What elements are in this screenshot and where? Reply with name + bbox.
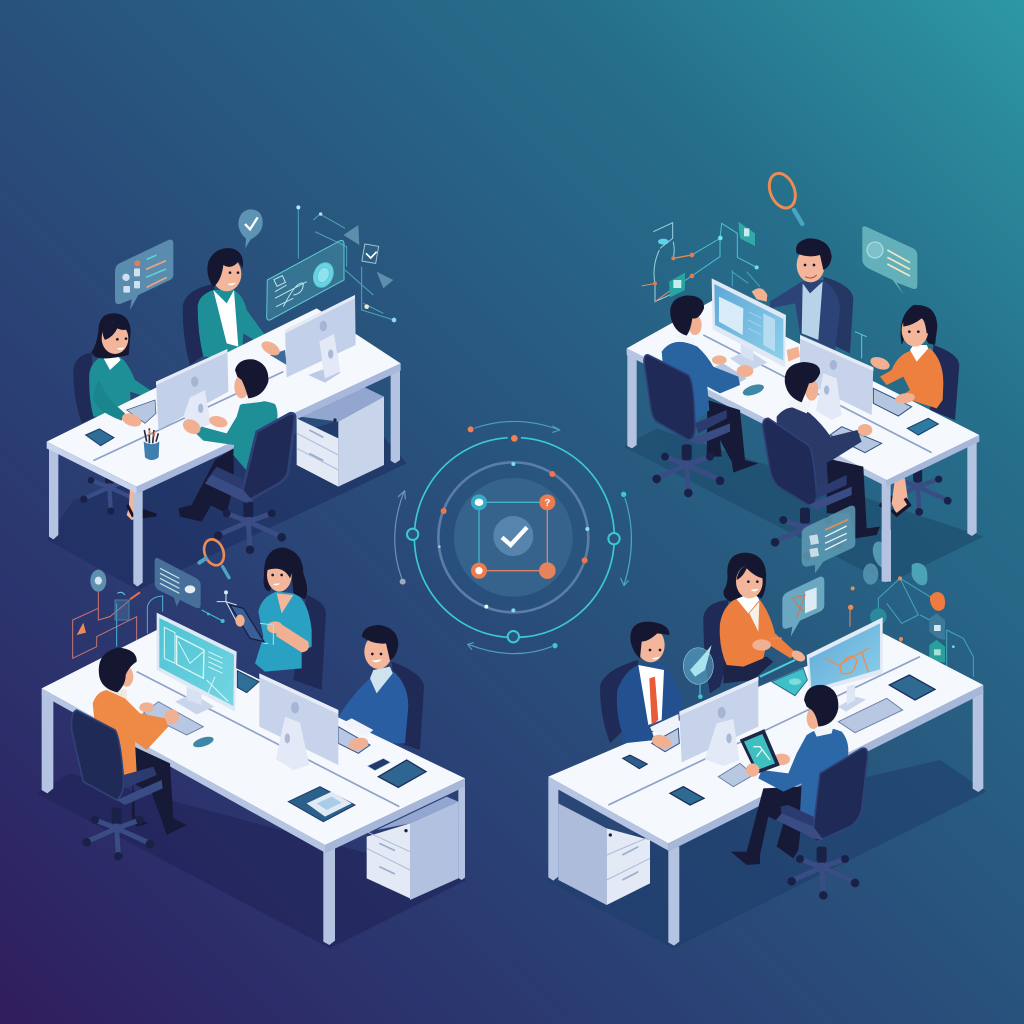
front chair: [776, 748, 868, 900]
person: woman with teal cardigan, left: [89, 313, 156, 520]
desk divider: [608, 657, 920, 805]
floor shadow: [623, 428, 983, 583]
person: woman in orange, right: [869, 305, 943, 515]
phone: [623, 755, 647, 769]
front chair: [72, 710, 163, 861]
mouse: [741, 382, 765, 398]
back chair: top woman: [183, 284, 217, 365]
hub disc: [454, 478, 573, 597]
book: near: [670, 787, 704, 805]
back chair: right woman: [887, 345, 959, 516]
keyboard: [143, 702, 203, 735]
mouse: [192, 735, 215, 749]
desk divider: [137, 672, 399, 807]
person: woman in blue top, holding tablet: [230, 547, 312, 672]
hologram: signature panel and network: [267, 205, 396, 322]
desk side edges: [47, 442, 137, 493]
hologram: workflow circuit: [73, 570, 238, 658]
team 2: top-right desk: [623, 169, 983, 583]
book: top right: [378, 760, 426, 787]
right woman's hand: [894, 392, 916, 405]
woman's hand: [790, 648, 807, 664]
teal tablet: [760, 660, 807, 696]
team 3: bottom-left desk: [37, 537, 467, 948]
keyboard: right woman: [873, 388, 912, 416]
check bubble: [238, 209, 263, 248]
desk: [47, 295, 401, 587]
desk divider: [93, 372, 283, 461]
desk legs: [42, 693, 465, 945]
ring markers: [407, 435, 620, 642]
inner ring: [438, 462, 588, 612]
speech bubble: dashboard: [115, 240, 173, 310]
floor shadow: [37, 773, 467, 948]
process nodes: ?: [544, 498, 550, 509]
monitor: screen view: [157, 613, 237, 714]
rotating arrows: [395, 421, 631, 654]
person: man, front left: [662, 295, 758, 473]
person: man in blue at front with tablet: [731, 685, 848, 865]
desktop: [47, 308, 401, 487]
back chair: left woman: [73, 353, 141, 515]
monitor: screen view: [712, 278, 786, 371]
central hub: [395, 421, 631, 654]
desktop: [627, 300, 979, 480]
phone: [367, 758, 391, 771]
back chair: man: [600, 660, 638, 743]
keyboard: front right man: [830, 427, 882, 453]
desk side edges: [627, 348, 887, 487]
person: man, front right: [777, 362, 880, 538]
desk legs: [49, 370, 400, 587]
arrow end dots: [400, 426, 626, 648]
desktop: [42, 630, 465, 845]
desktop: [548, 633, 983, 843]
desk: [627, 278, 979, 582]
back chair: man: [823, 277, 853, 353]
paper under hand: [773, 753, 793, 768]
outer ring: [414, 438, 614, 637]
floor shadow: [47, 413, 407, 590]
back man's hand: [787, 347, 800, 362]
back chair: woman: [293, 595, 326, 690]
keyboard: man: [338, 727, 370, 753]
monitor: screen view: [807, 617, 883, 712]
hologram: workflow network: [642, 222, 867, 358]
hologram: right network: [848, 530, 973, 680]
speech bubble: diagram: [782, 577, 824, 637]
front left chair: [644, 355, 730, 497]
speech bubble: report: [155, 558, 201, 608]
desk: [548, 617, 983, 946]
filing cabinet: [367, 797, 458, 900]
open book: [288, 787, 355, 822]
magnifier: [199, 537, 229, 578]
process square: [479, 502, 547, 571]
check badge: [493, 516, 533, 556]
magnifier: [764, 169, 802, 224]
person: man in blue sweater: [338, 625, 408, 743]
monitor: rear view, far: [285, 295, 356, 383]
person: woman in orange: [720, 553, 796, 683]
monitor: rear view, near: [156, 349, 228, 430]
arm and hand: top woman: [259, 338, 282, 358]
monitor: rear view: [679, 677, 758, 766]
process nodes: [471, 494, 556, 579]
keyboard: man: [652, 728, 679, 752]
desk legs: [627, 353, 977, 582]
monitor: rear view: [259, 673, 338, 770]
book: far: [889, 675, 935, 700]
back chair: man: [392, 662, 424, 750]
keyboard far: [270, 350, 287, 365]
man's hand: [347, 736, 370, 752]
team 4: bottom-right desk: [545, 530, 987, 948]
paper: [342, 718, 373, 737]
front chair: [205, 413, 295, 554]
desk legs: [548, 690, 983, 946]
paper: [647, 714, 679, 736]
person: man in blue suit with red tie: [617, 622, 685, 742]
keyboard: front right: [838, 698, 903, 733]
filing cabinet: [558, 803, 650, 905]
desk side edges: [548, 777, 668, 851]
tablet: [86, 429, 114, 446]
person: woman in orange at front: [93, 648, 187, 835]
person: woman with teal blazer, top: [198, 248, 267, 358]
speech bubble: document: [802, 506, 855, 573]
filing cabinet: [297, 387, 384, 487]
keyboard: front man: [718, 763, 753, 787]
person: man at front: [178, 359, 277, 522]
person: man in navy suit, back: [752, 238, 840, 350]
keyboard: [127, 400, 156, 423]
monitor: rear view: [800, 335, 873, 420]
pencil cup: [144, 428, 159, 460]
floor shadow: [545, 760, 987, 948]
team 1: top-left desk: [47, 205, 407, 590]
front right chair: [763, 418, 852, 561]
arm and hand: left woman: [93, 380, 143, 429]
back chair: woman: [703, 600, 728, 693]
speech bubble: settings: [862, 226, 917, 295]
keyboard: front left man: [715, 363, 747, 383]
man's hand and cuff: [620, 727, 673, 751]
tablet: [237, 671, 259, 693]
desk: [42, 613, 465, 945]
tablet: [907, 418, 938, 435]
holographic orb: [683, 645, 713, 699]
desk divider: [703, 335, 932, 453]
desk side edges: [42, 688, 325, 853]
